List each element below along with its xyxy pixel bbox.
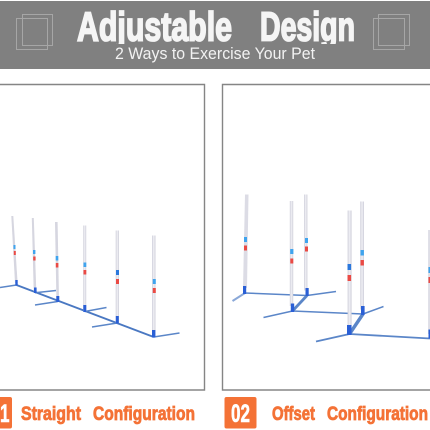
title: Design xyxy=(260,4,355,50)
base: offset feet xyxy=(232,292,430,342)
title: Adjustable xyxy=(77,4,232,50)
panel: offset configuration xyxy=(222,84,430,390)
label: straight configuration: Configuration xyxy=(93,404,195,425)
badge 01 xyxy=(0,397,12,428)
title xyxy=(76,10,354,44)
label: straight configuration xyxy=(21,404,195,425)
icon: left overlapping squares xyxy=(16,14,52,50)
icon: right overlapping squares xyxy=(374,14,410,50)
badge 02: 02 xyxy=(231,400,250,428)
poles: straight xyxy=(11,216,155,336)
pole markers: offset xyxy=(244,237,430,283)
header banner xyxy=(0,1,430,69)
poles: offset xyxy=(243,194,430,334)
pole bases: offset xyxy=(243,286,430,338)
pole markers: straight xyxy=(14,245,156,293)
base: straight feet xyxy=(0,285,180,337)
label: offset configuration xyxy=(272,404,428,425)
subtitle: 2 Ways to Exercise Your Pet xyxy=(115,44,315,63)
label: offset configuration: Offset xyxy=(272,404,316,425)
badge 02 xyxy=(224,397,256,428)
panel: straight configuration xyxy=(0,84,204,390)
label: straight configuration: Straight xyxy=(21,404,82,425)
pole bases: straight xyxy=(15,280,155,338)
